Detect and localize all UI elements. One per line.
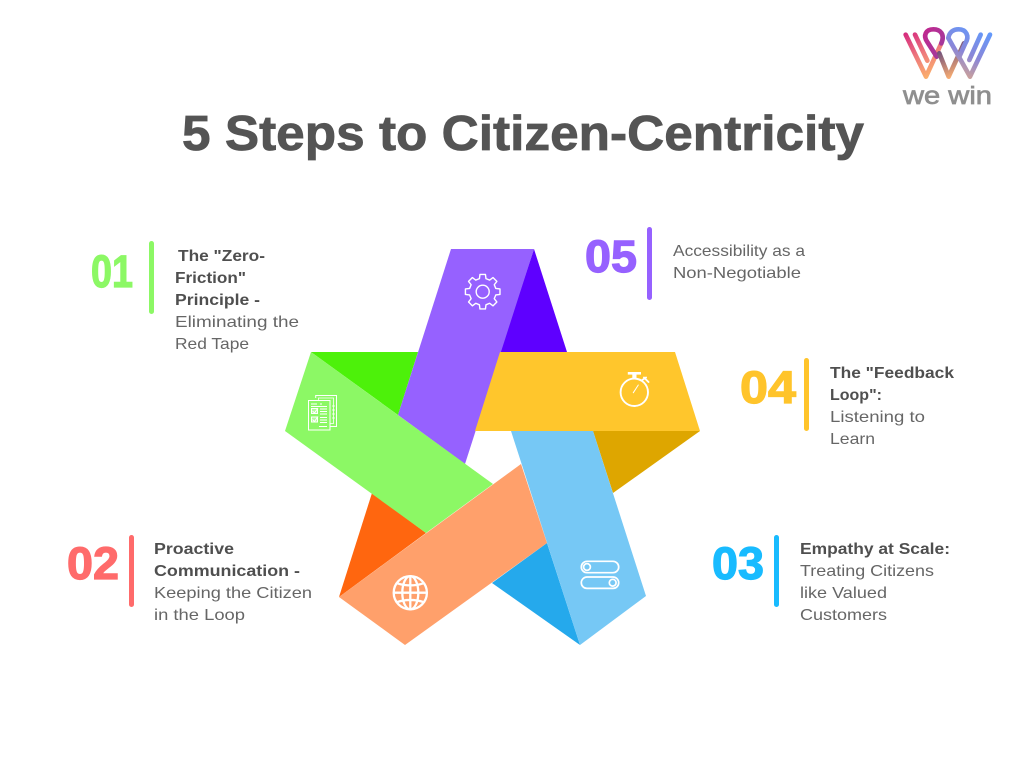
- step 04: [740, 358, 954, 448]
- text 01: [175, 248, 299, 353]
- fold: dark green: [311, 352, 418, 415]
- text 03: like Valued: [800, 585, 887, 602]
- fold: dark yellow: [593, 431, 700, 493]
- divider 04: [804, 358, 809, 431]
- text 03: Customers: [800, 607, 887, 624]
- fold: dark orange: [339, 493, 426, 597]
- step 02: [67, 535, 312, 624]
- text 04: The "Feedback: [830, 365, 954, 382]
- text 01: Eliminating the: [175, 314, 299, 331]
- step 03: [712, 535, 950, 624]
- band: light blue: [511, 431, 646, 645]
- star diagram: [285, 249, 700, 645]
- band: purple: [398, 249, 534, 464]
- logo: We Win: [902, 29, 992, 110]
- icon: globe: [394, 576, 427, 609]
- divider 01: [149, 241, 154, 314]
- text 05: Accessibility as a: [673, 243, 805, 260]
- text 03: Empathy at Scale:: [800, 541, 950, 558]
- band: yellow: [475, 352, 700, 431]
- fold: dark blue: [492, 543, 580, 645]
- divider 02: [129, 535, 134, 607]
- text 01: The "Zero-: [178, 248, 265, 265]
- divider 03: [774, 535, 779, 607]
- text 02: Communication -: [154, 563, 300, 580]
- text 04: Listening to: [830, 409, 925, 426]
- step 05: [585, 227, 805, 300]
- band: green: [285, 352, 493, 533]
- icon: toggles: [581, 561, 619, 588]
- number 04: 04: [740, 362, 796, 413]
- icon: stopwatch: [621, 372, 648, 406]
- number 03: 03: [712, 538, 764, 589]
- text 01: Principle -: [175, 292, 260, 309]
- fold: dark purple: [500, 249, 567, 352]
- logo wordmark: we win: [902, 82, 992, 110]
- text 02: in the Loop: [154, 607, 245, 624]
- number 05: 05: [585, 231, 637, 282]
- logo mark: [906, 29, 990, 77]
- text 04: Learn: [830, 431, 875, 448]
- text 01: Friction": [175, 270, 246, 287]
- number 02: 02: [67, 538, 119, 589]
- number 01: 01: [91, 246, 133, 297]
- divider 05: [647, 227, 652, 300]
- text 03: Treating Citizens: [800, 563, 934, 580]
- text 05: [673, 243, 805, 282]
- band: orange: [339, 464, 547, 645]
- text 03: [800, 541, 950, 624]
- icon: documents checklist: [308, 396, 336, 430]
- title: 5 Steps to Citizen-Centricity: [182, 107, 864, 161]
- icon: gear: [465, 274, 500, 309]
- step 01: [91, 241, 299, 353]
- text 04: Loop":: [830, 387, 882, 404]
- text 02: Keeping the Citizen: [154, 585, 312, 602]
- text 05: Non-Negotiable: [673, 265, 801, 282]
- text 02: Proactive: [154, 541, 234, 558]
- text 04: [830, 365, 954, 448]
- text 01: Red Tape: [175, 336, 249, 353]
- text 02: [154, 541, 312, 624]
